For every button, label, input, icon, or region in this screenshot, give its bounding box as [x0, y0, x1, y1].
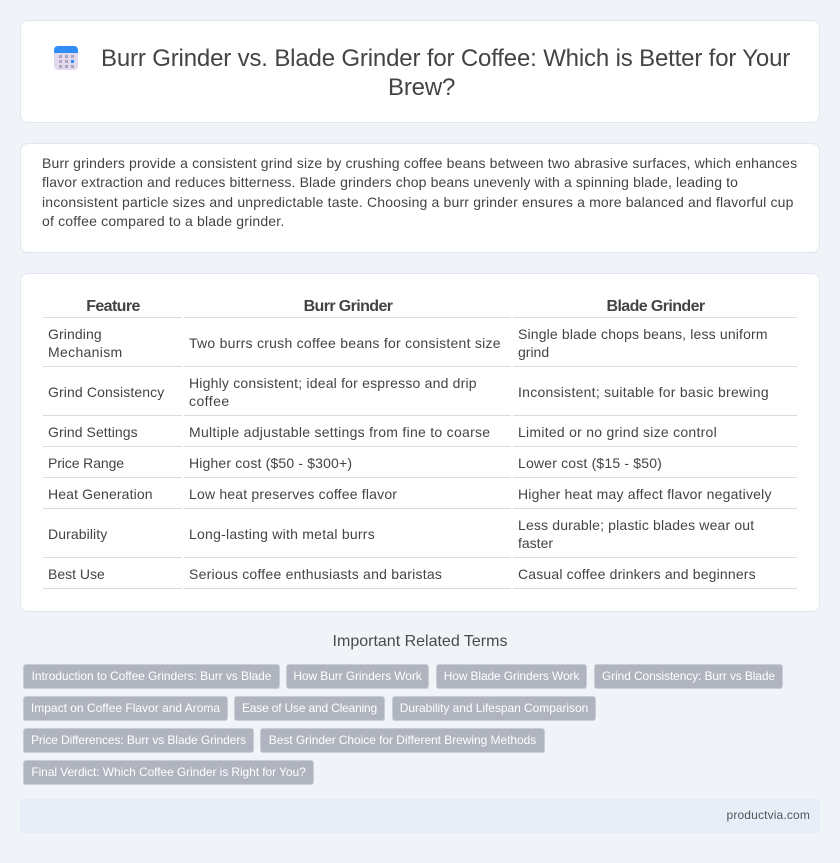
row: grind settings: Limited or no grind size control [518, 424, 717, 440]
tag: Durability and Lifespan Comparison [400, 701, 588, 715]
heading: important related terms: Important Related Terms [333, 633, 507, 650]
title: Brew? [388, 74, 455, 101]
tag: Ease of Use and Cleaning [242, 701, 377, 715]
tag: Final Verdict: Which Coffee Grinder is Right for You? [31, 765, 306, 779]
title: Burr Grinder vs. Blade Grinder for Coffee: Which is Better for Your [101, 45, 790, 72]
row: grinding mechanism: Single blade chops beans, less uniform [518, 326, 768, 342]
tag [23, 664, 280, 689]
icon: calendar app [54, 46, 78, 70]
row: heat generation: Higher heat may affect flavor negatively [518, 486, 772, 502]
row: price range: Higher cost ($50 - $300+) [189, 455, 352, 471]
row: grind settings [48, 424, 717, 440]
row: price range [48, 455, 662, 471]
row: grind consistency [48, 375, 769, 409]
row: grind consistency: Grind Consistency [48, 384, 164, 400]
row: best use: Casual coffee drinkers and beginners [518, 566, 756, 582]
row: best use: Best Use [48, 566, 105, 582]
row: heat generation: Heat Generation [48, 486, 153, 502]
row: heat generation [48, 486, 772, 502]
tag: How Blade Grinders Work [444, 669, 579, 683]
row: grind consistency: Highly consistent; ideal for espresso and drip [189, 375, 477, 391]
row: price range: Lower cost ($15 - $50) [518, 455, 662, 471]
row: grinding mechanism [48, 326, 768, 360]
row: best use: Serious coffee enthusiasts and baristas [189, 566, 442, 582]
tag [260, 728, 545, 753]
tag [23, 728, 254, 753]
table header row [86, 298, 705, 315]
text block: intro paragraph: Burr grinders provide a consistent grind size by crushing coffee beans between two abrasive surfaces, which enhances [42, 155, 797, 171]
tag [594, 664, 783, 689]
row: durability: Durability [48, 526, 107, 542]
row: grind settings: Multiple adjustable settings from fine to coarse [189, 424, 490, 440]
tag [23, 696, 228, 721]
tag [234, 696, 385, 721]
tag [436, 664, 587, 689]
comparison table [43, 298, 797, 589]
tag: Best Grinder Choice for Different Brewing Methods [269, 733, 536, 747]
footer bar [20, 799, 820, 833]
title [101, 45, 790, 101]
text block: intro paragraph: flavor extraction and reduces bitterness. Blade grinders chop beans unevenly with a spinning blade, leading to [42, 174, 738, 190]
row: durability: Less durable; plastic blades wear out [518, 517, 754, 533]
row: durability [48, 517, 754, 551]
panel: title card [20, 20, 820, 123]
text block: intro paragraph: of coffee compared to a blade grinder. [42, 213, 284, 229]
tag: Grind Consistency: Burr vs Blade [602, 669, 775, 683]
row: heat generation: Low heat preserves coffee flavor [189, 486, 397, 502]
table header row: Feature [86, 298, 140, 315]
text block: intro paragraph [42, 155, 797, 229]
tag: How Burr Grinders Work [293, 669, 422, 683]
panel: intro paragraph card [20, 143, 820, 253]
text block: intro paragraph: inconsistent particle sizes and unpredictable taste. Choosing a burr grinder ensures a more balanced and flavorful cup [42, 194, 794, 210]
panel: comparison table card [20, 273, 820, 612]
footer source label: productvia.com [727, 808, 810, 822]
row: durability: Long-lasting with metal burrs [189, 526, 375, 542]
row: durability: faster [518, 535, 553, 551]
row: best use [48, 566, 756, 582]
row: grind consistency: coffee [189, 393, 230, 409]
tag: Price Differences: Burr vs Blade Grinders [31, 733, 246, 747]
tag [23, 760, 314, 785]
tag [286, 664, 429, 689]
row: price range: Price Range [48, 455, 124, 471]
tag: Impact on Coffee Flavor and Aroma [31, 701, 220, 715]
row: grind consistency: Inconsistent; suitable for basic brewing [518, 384, 769, 400]
tag [392, 696, 596, 721]
tag: Introduction to Coffee Grinders: Burr vs Blade [32, 669, 271, 683]
row: grinding mechanism: Grinding [48, 326, 102, 342]
row: grinding mechanism: grind [518, 344, 549, 360]
panel: related term tags [23, 664, 783, 785]
row: grinding mechanism: Mechanism [48, 344, 123, 360]
table header row: Burr Grinder [304, 298, 392, 315]
row: grinding mechanism: Two burrs crush coffee beans for consistent size [189, 335, 501, 351]
row: grind settings: Grind Settings [48, 424, 138, 440]
table header row: Blade Grinder [606, 298, 704, 315]
